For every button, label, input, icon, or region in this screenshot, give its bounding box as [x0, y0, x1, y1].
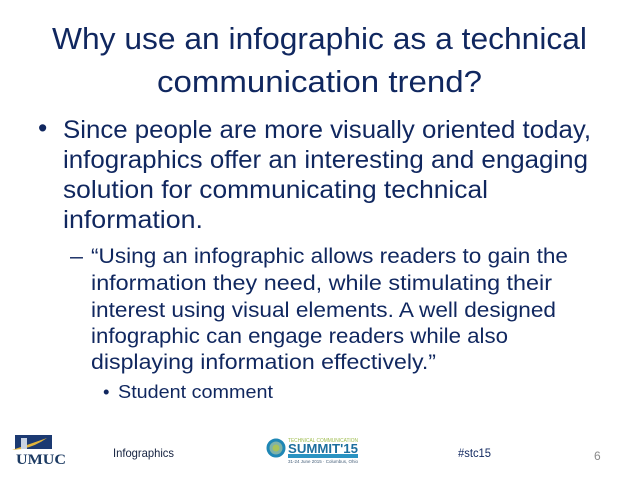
attribution: Student comment	[118, 381, 273, 402]
student quote: displaying information effectively.”	[91, 350, 436, 374]
footer label: Infographics: Infographics	[113, 446, 174, 460]
title: Why use an infographic as a technical	[52, 22, 587, 56]
student quote: information they need, while stimulating their	[91, 271, 552, 295]
footer label: hashtag: #stc15	[458, 446, 491, 460]
student quote: interest using visual elements. A well designed	[91, 298, 556, 322]
student quote: –	[70, 244, 83, 268]
student quote	[70, 244, 568, 374]
logo: UMUC: UMUC	[16, 452, 66, 468]
page number: 6	[594, 449, 601, 463]
logo: Summit 15: SUMMIT'15	[288, 442, 358, 456]
main bullet text	[38, 113, 591, 234]
logo: Summit 15: TECHNICAL COMMUNICATION	[288, 438, 358, 444]
main bullet text: Since people are more visually oriented today,	[63, 116, 591, 144]
title: communication trend?	[157, 65, 482, 99]
logo: Summit 15: 31-24 June 2015 · Columbus, Ohio	[288, 459, 358, 464]
main bullet text: information.	[63, 206, 203, 234]
title	[52, 22, 587, 99]
main bullet text: •	[38, 113, 47, 143]
attribution: •	[103, 381, 109, 402]
logo: UMUC	[12, 435, 66, 468]
main bullet text: solution for communicating technical	[63, 176, 488, 204]
student quote: “Using an infographic allows readers to gain the	[91, 244, 568, 268]
main bullet text: infographics offer an interesting and engaging	[63, 146, 588, 174]
logo: Summit 15	[268, 438, 358, 464]
student quote: infographic can engage readers while also	[91, 324, 508, 348]
